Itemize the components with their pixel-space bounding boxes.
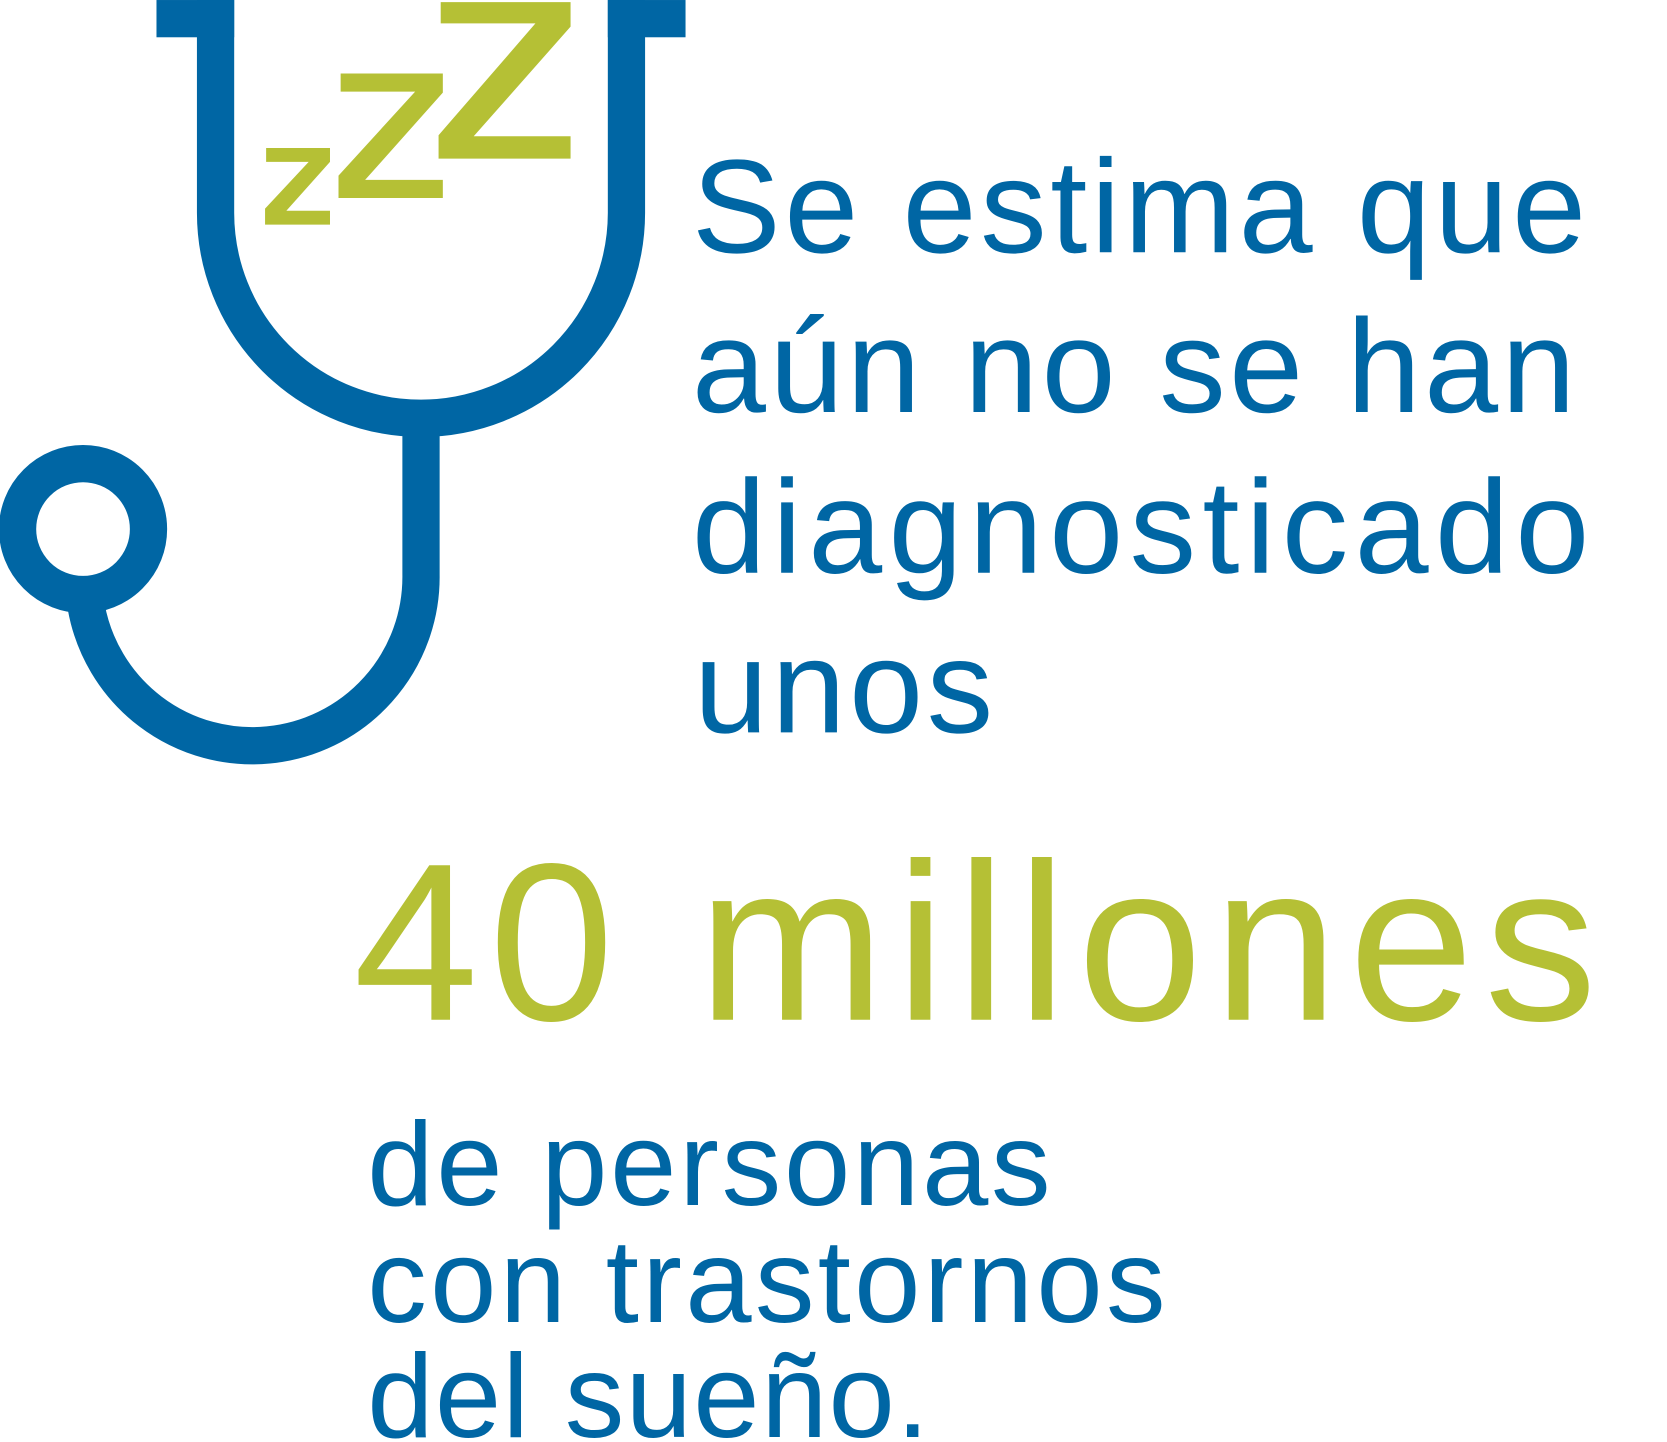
text: intro (692, 133, 1589, 761)
icon: sleep zzz (265, 2, 571, 225)
text: conclusion: de personas (367, 1098, 1051, 1231)
text: intro: diagnosticado (692, 454, 1589, 602)
text: intro: Se estima que (692, 133, 1586, 281)
text: conclusion: con trastornos (367, 1215, 1166, 1348)
text: intro: unos (694, 613, 993, 761)
headline number: 40 millones: 40 millones (353, 817, 1597, 1068)
icon: stethoscope (18, 0, 686, 746)
text: intro: aún no se han (692, 293, 1575, 441)
text: conclusion (367, 1098, 1166, 1442)
